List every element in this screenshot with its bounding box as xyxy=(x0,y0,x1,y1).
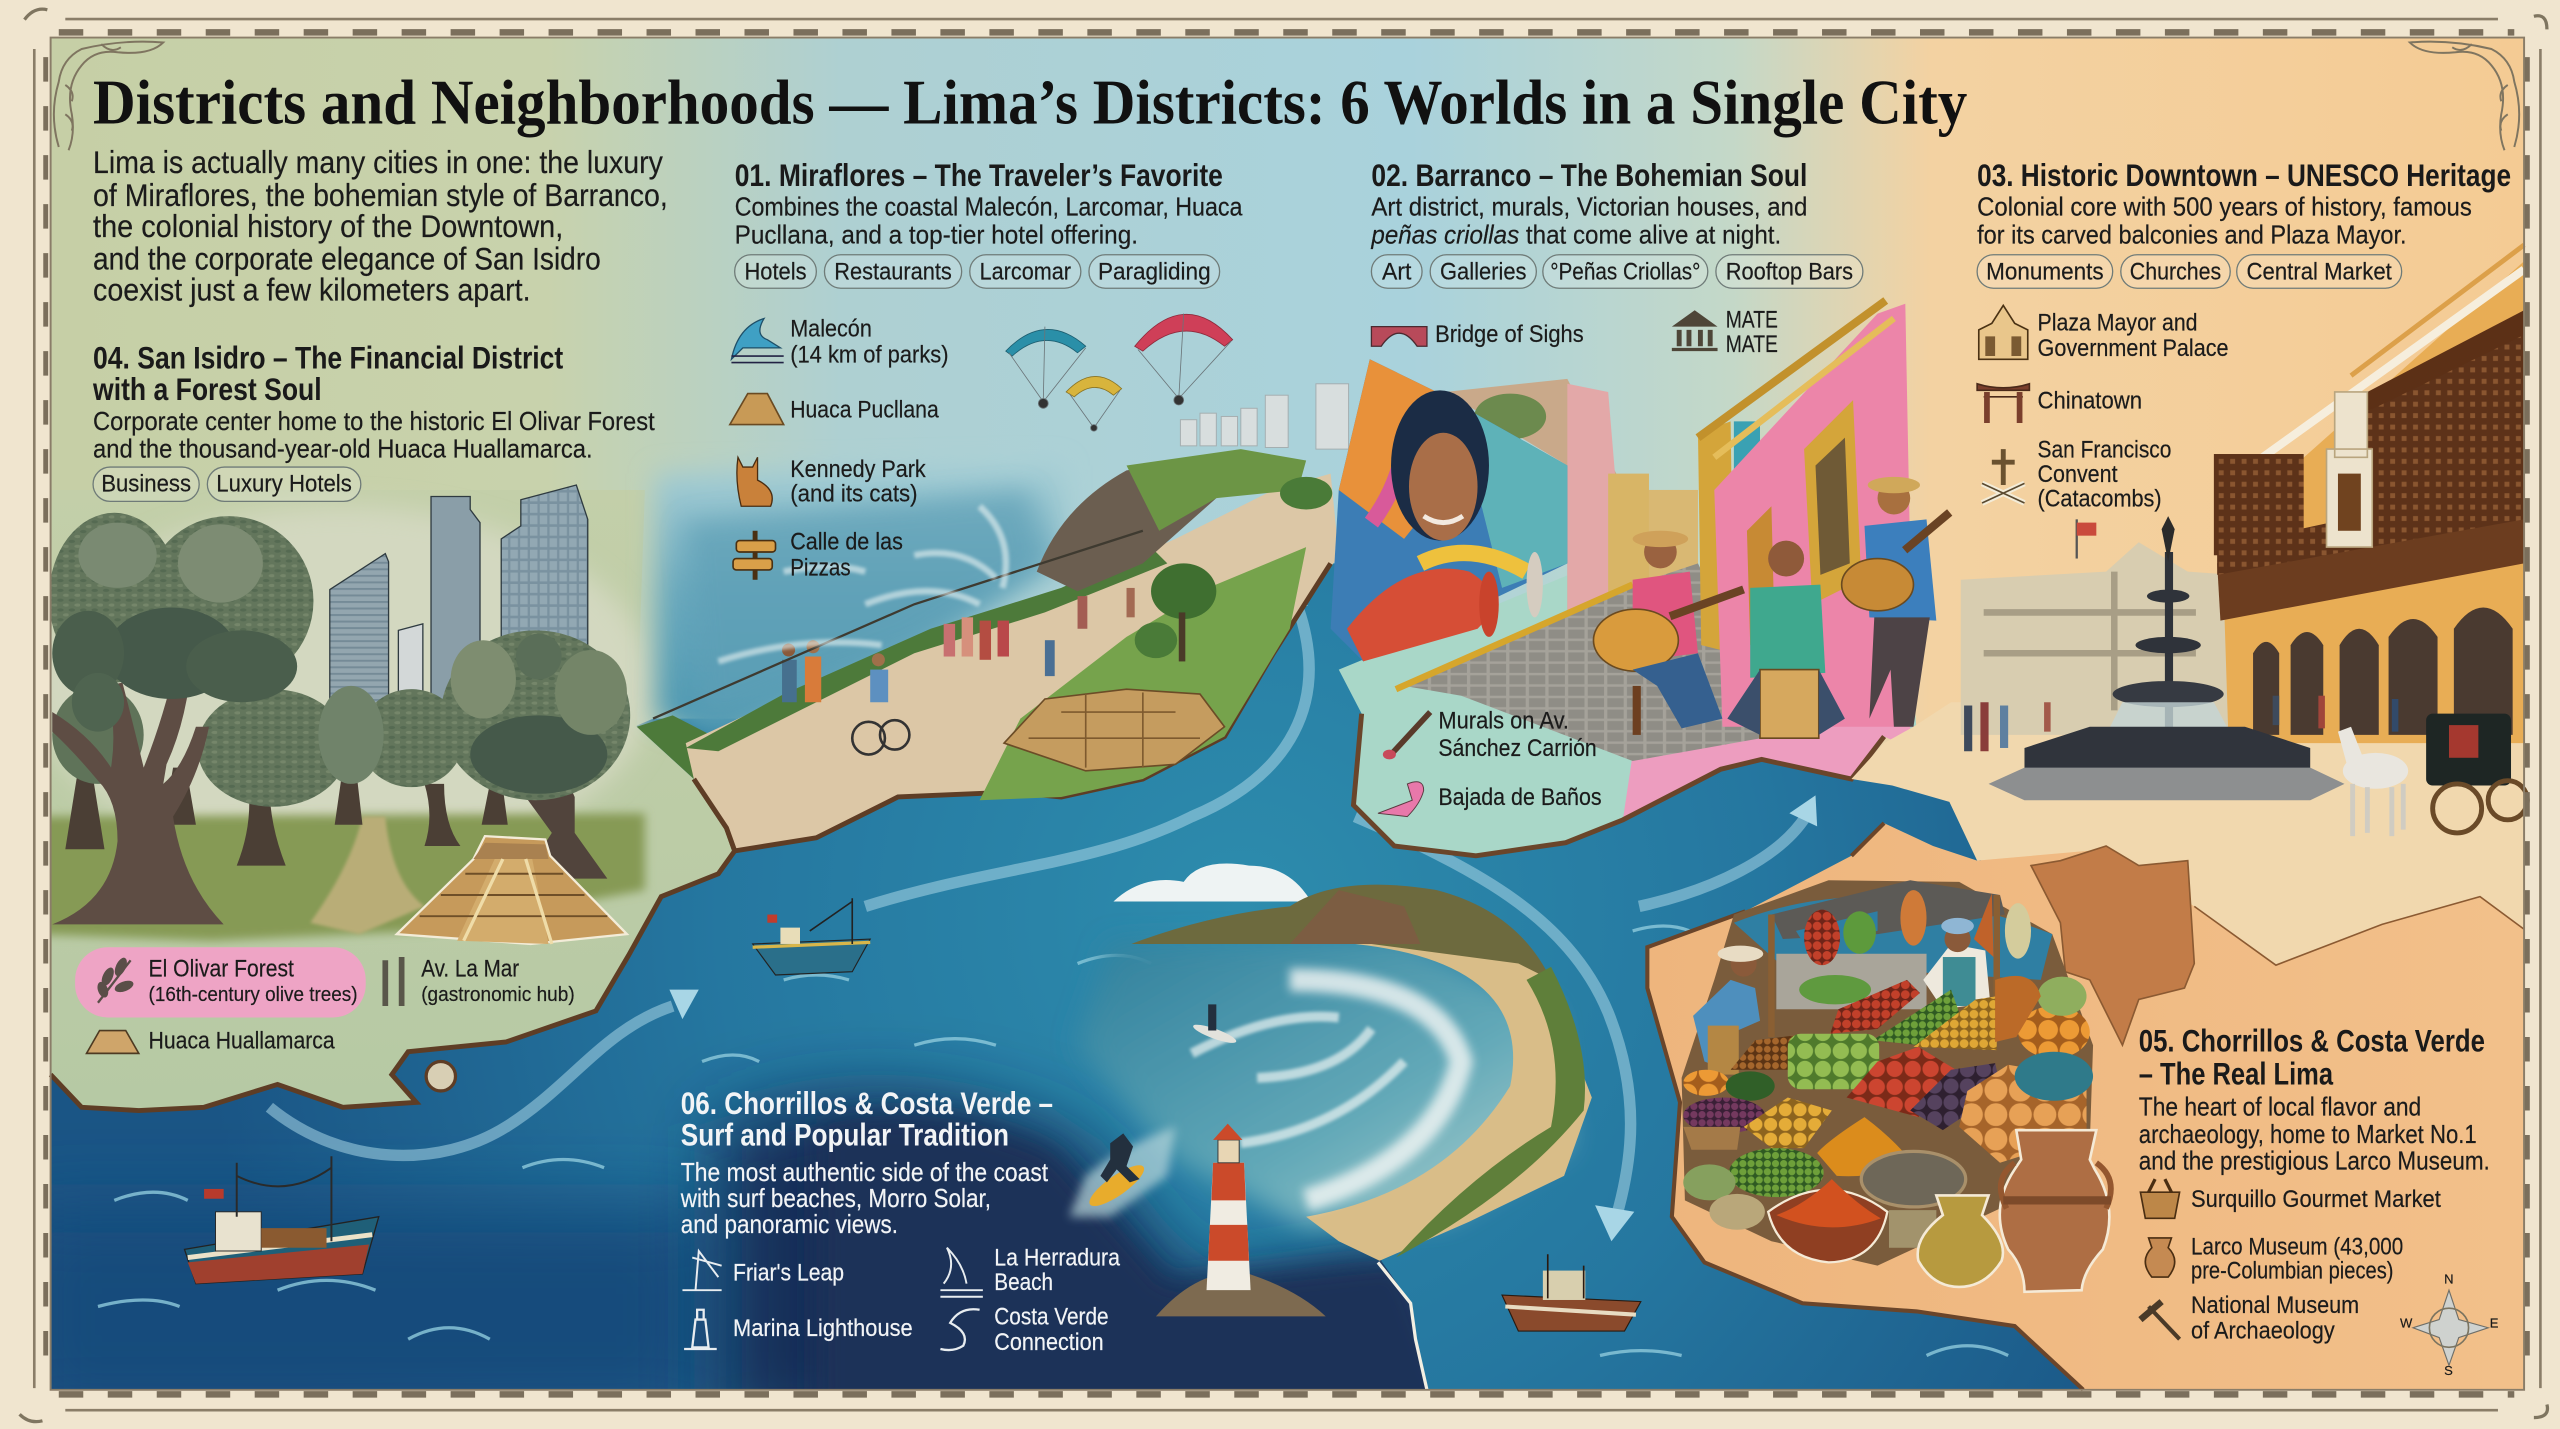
description: The Real Lima: The heart of local flavor and xyxy=(2139,1091,2421,1121)
item: Plaza Mayor and Government Palace: Government Palace xyxy=(2038,335,2229,362)
midground olive trees xyxy=(52,686,508,866)
chip: Galleries: Galleries xyxy=(1440,258,1527,285)
big carved balcony xyxy=(2367,310,2524,547)
street xyxy=(1404,563,1780,761)
arrow: San Isidro to Chorrillos xyxy=(269,990,699,1155)
item: Larco Museum: Larco Museum (43,000 xyxy=(2191,1233,2403,1260)
arrow: Barranco to Surquillo coast xyxy=(1355,817,1634,1241)
heading: San Isidro: with a Forest Soul xyxy=(92,371,322,407)
description: Surf: The most authentic side of the coast xyxy=(681,1157,1049,1187)
item: Bajada de Banos: Bajada de Baños xyxy=(1438,784,1602,811)
illustration: brown wooden boat xyxy=(1502,1254,1641,1331)
skyscrapers xyxy=(330,485,588,719)
item: Murals on Av. Sanchez Carrion: Sánchez Carrión xyxy=(1438,735,1597,762)
arcade xyxy=(2253,608,2513,735)
government palace xyxy=(1961,542,2233,735)
title: Districts and Neighborhoods — Lima’s Districts: 6 Worlds in a Single City xyxy=(93,66,1967,137)
description: Surf xyxy=(680,1157,1049,1239)
bay water xyxy=(1078,939,1567,1225)
item: MATE: MATE xyxy=(1726,306,1778,333)
item: Huaca Pucllana: Huaca Pucllana xyxy=(790,396,939,423)
description: Downtown xyxy=(1977,192,2472,249)
large olive tree right xyxy=(441,630,630,879)
sand xyxy=(1306,931,1592,1261)
item: Chinatown xyxy=(1977,384,2142,423)
item: Kennedy Park: Kennedy Park xyxy=(790,456,926,483)
description: San Isidro: and the thousand-year-old Huaca Huallamarca. xyxy=(93,433,593,463)
intro text block xyxy=(93,145,668,307)
item: National Museum of Archaeology: of Archaeology xyxy=(2191,1318,2335,1345)
icon: olive branch xyxy=(95,956,135,1003)
item: MATE: MATE xyxy=(1726,331,1778,358)
illustration: lighthouse xyxy=(1156,1124,1326,1316)
item: Av. La Mar: (gastronomic hub) xyxy=(421,983,575,1006)
item: Costa Verde Connection: Connection xyxy=(994,1329,1104,1356)
item: Friars Leap: Friar's Leap xyxy=(733,1259,844,1286)
darker district shape xyxy=(2031,846,2194,1045)
item: Marina Lighthouse: Marina Lighthouse xyxy=(733,1315,913,1342)
foam xyxy=(1290,980,1461,1200)
item: Malecon: (14 km of parks) xyxy=(790,342,949,369)
item: La Herradura Beach xyxy=(940,1245,1120,1297)
panel: 04 San Isidro xyxy=(75,340,655,1054)
heading: Miraflores: 01. Miraflores – The Traveler’s Favorite xyxy=(735,157,1223,193)
description: Miraflores: Pucllana, and a top-tier hotel offering. xyxy=(735,219,1138,249)
intro text block: the colonial history of the Downtown, xyxy=(93,209,563,244)
hanging produce xyxy=(1804,890,2031,965)
item: Plaza Mayor and Government Palace: Plaza Mayor and xyxy=(2038,310,2198,337)
item: Costa Verde Connection xyxy=(940,1303,1109,1356)
musician on cajon xyxy=(1727,541,1845,738)
item: Friars Leap xyxy=(682,1251,844,1290)
item: Huaca Huallamarca: Huaca Huallamarca xyxy=(149,1027,335,1054)
item: Larco Museum xyxy=(2145,1233,2403,1285)
heading: San Isidro: 04. San Isidro – The Financial District xyxy=(93,340,564,376)
stall backdrop xyxy=(1682,880,2093,1266)
panel: 03 Historic Downtown xyxy=(1977,157,2511,512)
arrows: tour route across the ocean xyxy=(269,583,1817,1241)
item: Bridge of Sighs: Bridge of Sighs xyxy=(1435,321,1584,348)
musician with guitar, seated xyxy=(1593,531,1745,735)
chip: Churches: Churches xyxy=(2130,258,2221,285)
illustration: Barranco street scene xyxy=(1331,300,1952,761)
paraglider: red xyxy=(1135,314,1233,405)
item: Calle de las Pizzas: Calle de las xyxy=(790,529,903,556)
panel: 01 Miraflores xyxy=(730,157,1243,582)
heading: Surf and Popular Tradition: 06. Chorrillos & Costa Verde – xyxy=(681,1085,1053,1121)
chip: Hotels: Hotels xyxy=(744,258,807,285)
illustration: Costa Verde bay, Morro Solar hill and beach xyxy=(1078,864,1592,1261)
item: La Herradura Beach: La Herradura xyxy=(994,1245,1120,1272)
skyline behind the cliff xyxy=(1180,384,1349,449)
mural wall xyxy=(1331,359,1567,661)
illustration: surfers xyxy=(1069,1004,1238,1217)
arrow: Surquillo to Downtown xyxy=(1639,795,1817,906)
paraglider: blue xyxy=(1006,327,1086,408)
item: Larco Museum: pre-Columbian pieces) xyxy=(2191,1258,2393,1285)
intro text block: Lima is actually many cities in one: the luxury xyxy=(93,145,663,180)
stall posts xyxy=(1771,895,1997,1037)
item: Malecon xyxy=(731,315,949,369)
heading: The Real Lima xyxy=(2139,1023,2485,1091)
item: Bridge of Sighs xyxy=(1371,321,1584,348)
surf foam on Miraflores sea xyxy=(718,506,1006,661)
compass rose: N xyxy=(2444,1272,2454,1287)
illustration: red and white fishing boat xyxy=(184,1156,379,1284)
description: Downtown: for its carved balconies and Plaza Mayor. xyxy=(1977,219,2407,249)
item: Av. La Mar xyxy=(385,956,575,1006)
awning xyxy=(1771,880,2005,939)
chip: Larcomar: Larcomar xyxy=(980,258,1071,285)
white window frame xyxy=(2327,392,2372,547)
compass rose xyxy=(2400,1272,2499,1378)
item: Costa Verde Connection: Costa Verde xyxy=(994,1303,1109,1330)
heading: The Real Lima: 05. Chorrillos & Costa Verde xyxy=(2139,1023,2485,1059)
chip: Penas Criollas: °Peñas Criollas° xyxy=(1550,258,1700,285)
description: Downtown: Colonial core with 500 years of history, famous xyxy=(1977,192,2472,222)
panel: 06 Chorrillos and Costa Verde, Surf xyxy=(680,1085,1120,1356)
item: San Francisco Convent: Convent xyxy=(2038,461,2118,488)
vendor right xyxy=(1923,918,1990,1009)
chip: Rooftop Bars: Rooftop Bars xyxy=(1726,258,1853,285)
paraglider: yellow xyxy=(1066,376,1122,431)
chip: Luxury Hotels: Luxury Hotels xyxy=(216,471,352,498)
illustration: central market stall and pottery xyxy=(1682,880,2111,1292)
ceramic vessels xyxy=(1918,1130,2111,1292)
ruins Huaca Pucllana xyxy=(1004,689,1224,771)
pink callout: El Olivar Forest: El Olivar Forest xyxy=(149,956,294,983)
plaza crowd xyxy=(1964,696,2398,751)
description: Barranco xyxy=(1371,192,1807,249)
panel: 05 Chorrillos and Costa Verde, The Real Lima xyxy=(2139,1023,2490,1345)
description: San Isidro xyxy=(93,406,655,463)
item: Huaca Pucllana xyxy=(730,394,939,425)
description: Miraflores: Combines the coastal Malecón, Larcomar, Huaca xyxy=(735,192,1243,222)
item: Chinatown: Chinatown xyxy=(2038,387,2142,414)
item: MATE xyxy=(1672,306,1778,358)
chip: Art xyxy=(1371,255,1422,288)
intro text block: and the corporate elegance of San Isidro xyxy=(93,241,601,276)
pyramid Huaca Huallamarca xyxy=(397,836,627,944)
green slope and lawn xyxy=(980,547,1306,800)
land: Surquillo and Chorrillos peach region xyxy=(1647,823,2524,1390)
description: Surf: and panoramic views. xyxy=(681,1209,898,1239)
paragliders xyxy=(1006,314,1233,431)
item: San Francisco Convent: San Francisco xyxy=(2038,436,2171,463)
description: Surf: with surf beaches, Morro Solar, xyxy=(680,1183,991,1213)
item: Av. La Mar: Av. La Mar xyxy=(421,956,519,983)
chip: Art: Art xyxy=(1382,258,1412,285)
description: The Real Lima: archaeology, home to Market No.1 xyxy=(2139,1119,2477,1149)
heading: Surf and Popular Tradition xyxy=(681,1085,1053,1153)
houses behind the street xyxy=(1445,379,1616,653)
pale haze behind forest xyxy=(52,502,662,818)
land: San Isidro xyxy=(51,490,735,1111)
description: Barranco: peñas criollas that come alive at night. xyxy=(1371,219,1781,249)
chip: Paragliding: Paragliding xyxy=(1098,258,1211,285)
pink callout: El Olivar Forest: (16th-century olive trees) xyxy=(149,983,358,1006)
item: Bajada de Banos xyxy=(1378,782,1602,817)
sea view: Miraflores coast water xyxy=(656,465,1061,743)
description: Miraflores xyxy=(735,192,1243,249)
description: Barranco: Art district, murals, Victorian houses, and xyxy=(1371,192,1807,222)
item: San Francisco Convent xyxy=(1982,436,2171,512)
item: National Museum of Archaeology: National Museum xyxy=(2191,1292,2359,1319)
chip: Central Market: Central Market xyxy=(2247,258,2392,285)
chip: Restaurants: Restaurants xyxy=(834,258,952,285)
heading: Barranco: 02. Barranco – The Bohemian Soul xyxy=(1371,157,1807,193)
cliff xyxy=(1037,454,1290,591)
Morro hill xyxy=(1131,885,1551,980)
chip: Monuments: Monuments xyxy=(1986,258,2104,285)
vendor left xyxy=(1693,946,1763,1075)
item: National Museum of Archaeology xyxy=(2140,1292,2359,1345)
large olive tree left xyxy=(49,513,313,924)
land: Barranco xyxy=(1339,555,1918,856)
item: Kennedy Park: (and its cats) xyxy=(790,480,918,507)
item: Kennedy Park xyxy=(737,456,926,507)
item: Plaza Mayor and Government Palace xyxy=(1979,305,2229,362)
illustration: blue fishing boat xyxy=(753,898,870,975)
item: Murals on Av. Sanchez Carrion xyxy=(1383,707,1597,762)
compass rose: S xyxy=(2444,1363,2453,1378)
item: Marina Lighthouse xyxy=(684,1310,913,1349)
heading: Surf and Popular Tradition: Surf and Popular Tradition xyxy=(681,1117,1009,1153)
arrow: Chorrillos to Miraflores xyxy=(865,583,1309,906)
item: Surquillo Gourmet Market: Surquillo Gourmet Market xyxy=(2191,1186,2441,1213)
green slope beside beach xyxy=(1396,967,1585,1258)
musician standing with guitar xyxy=(1842,477,1952,727)
heading: The Real Lima: – The Real Lima xyxy=(2139,1055,2333,1091)
meadow xyxy=(33,813,645,941)
item: Surquillo Gourmet Market xyxy=(2140,1179,2441,1218)
heading: San Isidro xyxy=(92,340,564,407)
item: Huaca Huallamarca xyxy=(87,1027,335,1054)
description: San Isidro: Corporate center home to the historic El Olivar Forest xyxy=(93,406,655,436)
yellow colonial building xyxy=(2220,261,2524,743)
item: La Herradura Beach: Beach xyxy=(994,1269,1053,1296)
clouds xyxy=(1113,864,1311,901)
palm and trees xyxy=(1151,563,1216,619)
illustration: San Isidro forest and skyline xyxy=(33,485,653,944)
description: The Real Lima: and the prestigious Larco Museum. xyxy=(2139,1145,2490,1175)
ocean xyxy=(16,563,2106,1429)
item: San Francisco Convent: (Catacombs) xyxy=(2038,485,2162,512)
spice bowls xyxy=(1768,1117,1966,1262)
item: Murals on Av. Sanchez Carrion: Murals on Av. xyxy=(1438,707,1569,734)
produce crates xyxy=(1683,975,2093,1230)
compass rose: E xyxy=(2490,1316,2499,1331)
land: Miraflores xyxy=(637,449,1339,851)
description: The Real Lima xyxy=(2139,1091,2490,1175)
land: Historic Downtown xyxy=(1851,702,2524,965)
pink callout: El Olivar Forest xyxy=(75,947,366,1017)
lower left balcony xyxy=(2214,454,2304,555)
intro text block: of Miraflores, the bohemian style of Barranco, xyxy=(93,178,668,213)
item: Calle de las Pizzas xyxy=(733,529,903,582)
intro text block: coexist just a few kilometers apart. xyxy=(93,272,531,307)
illustration: Plaza Mayor, balconies and fountain xyxy=(1961,245,2527,836)
item: Calle de las Pizzas: Pizzas xyxy=(790,555,851,582)
fountain xyxy=(1989,516,2344,800)
chip: Hotels xyxy=(735,255,816,288)
compass rose: W xyxy=(2400,1316,2413,1331)
panel: 02 Barranco xyxy=(1371,157,1863,817)
walkers on the Malecon xyxy=(782,588,1135,755)
horse and carriage xyxy=(2338,714,2527,836)
crowd behind stall xyxy=(1776,954,1927,1009)
lower carved balustrade xyxy=(2217,490,2524,621)
colonial houses xyxy=(1734,421,1760,653)
chip: Business: Business xyxy=(101,471,191,498)
item: Malecon: Malecón xyxy=(790,315,872,342)
